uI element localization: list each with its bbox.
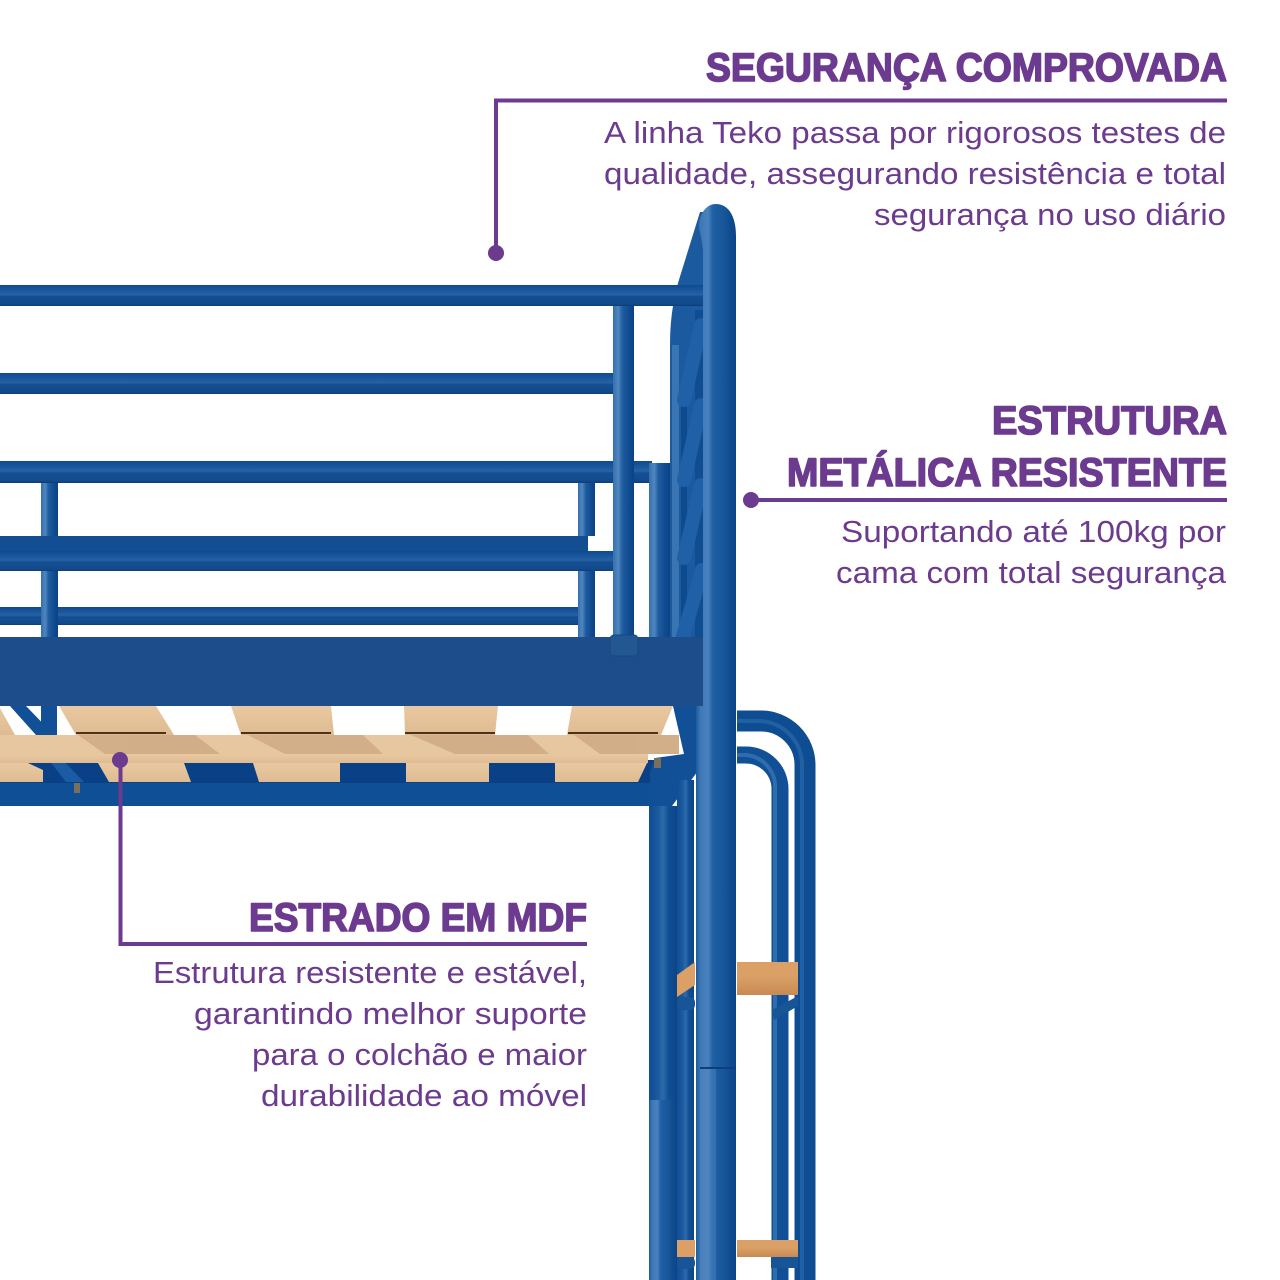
heading: ESTRUTURA xyxy=(992,399,1227,443)
leader dot xyxy=(743,492,759,508)
bolts xyxy=(74,758,661,793)
top side beam xyxy=(0,637,706,706)
body text: para o colchão e maior xyxy=(252,1037,587,1072)
leader line xyxy=(496,100,1227,253)
heading: METÁLICA RESISTENTE xyxy=(787,450,1227,495)
post lower section highlight xyxy=(700,1069,716,1280)
slatted base dark backing xyxy=(0,760,655,784)
body text: segurança no uso diário xyxy=(874,197,1226,232)
slats: lower segments xyxy=(0,754,648,782)
body text xyxy=(604,115,1226,232)
leader dot xyxy=(488,245,504,261)
callout: segurança comprovada xyxy=(488,46,1227,261)
back curved ladder frame xyxy=(670,212,704,640)
leader dot xyxy=(112,752,128,768)
step shelf upper xyxy=(737,962,798,1020)
illustration: blue metal loft bed xyxy=(0,204,805,1280)
body text: A linha Teko passa por rigorosos testes de xyxy=(604,115,1226,150)
slats: upper segments xyxy=(0,706,673,735)
body text: cama com total segurança xyxy=(836,555,1227,590)
callout: estrado em mdf xyxy=(112,752,587,1113)
body text xyxy=(836,514,1227,590)
body text: Estrutura resistente e estável, xyxy=(153,955,587,990)
front main post with dome xyxy=(696,204,736,1280)
guard rail horizontals xyxy=(0,285,705,625)
heading: SEGURANÇA COMPROVADA xyxy=(706,46,1227,90)
inner side rail xyxy=(737,755,780,1280)
rear step shelves xyxy=(677,962,695,1269)
guard rail verticals xyxy=(41,306,670,641)
heading: ESTRADO EM MDF xyxy=(249,896,587,940)
heading xyxy=(787,399,1227,495)
body text: garantindo melhor suporte xyxy=(194,996,587,1031)
corner bracket xyxy=(650,706,706,806)
ladder rungs xyxy=(682,325,702,640)
body text: qualidade, assegurando resistência e total xyxy=(604,156,1226,191)
leader line xyxy=(750,498,1227,502)
beam clip xyxy=(610,635,638,656)
slat shadows xyxy=(76,732,658,734)
left frame leg and brace behind slats xyxy=(10,706,84,782)
outer side rail xyxy=(737,721,805,1280)
body text xyxy=(153,955,587,1113)
left lower legs xyxy=(649,780,694,1280)
post joint line xyxy=(700,1067,736,1069)
callout: estrutura metálica resistente xyxy=(743,399,1227,590)
cross band shaded zones xyxy=(78,735,679,754)
body text: durabilidade ao móvel xyxy=(261,1078,587,1113)
slats: cross band xyxy=(0,735,679,754)
step shelf lower xyxy=(737,1240,798,1268)
lower side beam xyxy=(0,783,655,806)
leader line xyxy=(120,760,587,944)
body text: Suportando até 100kg por xyxy=(841,514,1226,549)
